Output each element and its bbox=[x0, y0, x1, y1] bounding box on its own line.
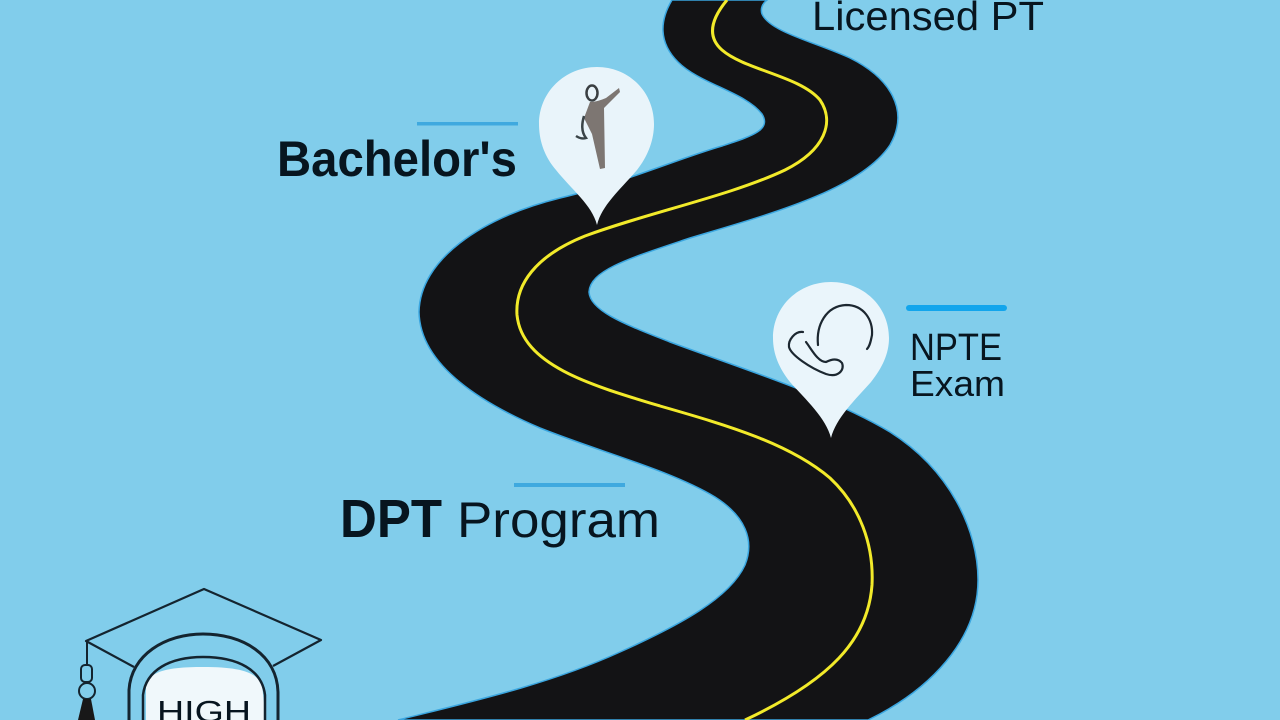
label: NPTE Exam bbox=[906, 305, 1007, 404]
label: NPTE Exam: Exam bbox=[910, 363, 1005, 404]
label: Bachelor's: Bachelor's bbox=[277, 131, 517, 187]
label: DPT Program: Program bbox=[457, 492, 660, 548]
icon: stretching figure bbox=[576, 86, 620, 169]
label: DPT Program: DPT bbox=[340, 489, 442, 549]
road centre line bbox=[517, 0, 872, 720]
label: DPT Program bbox=[340, 483, 660, 549]
label: NPTE Exam: NPTE bbox=[910, 327, 1002, 369]
icon: graduation cap with High School badge bbox=[78, 589, 321, 720]
pin: NPTE with phone icon bbox=[773, 282, 889, 438]
pin: Bachelor's with figure icon bbox=[539, 67, 654, 225]
winding road bbox=[398, 0, 978, 720]
icon: phone handset bbox=[789, 305, 872, 375]
